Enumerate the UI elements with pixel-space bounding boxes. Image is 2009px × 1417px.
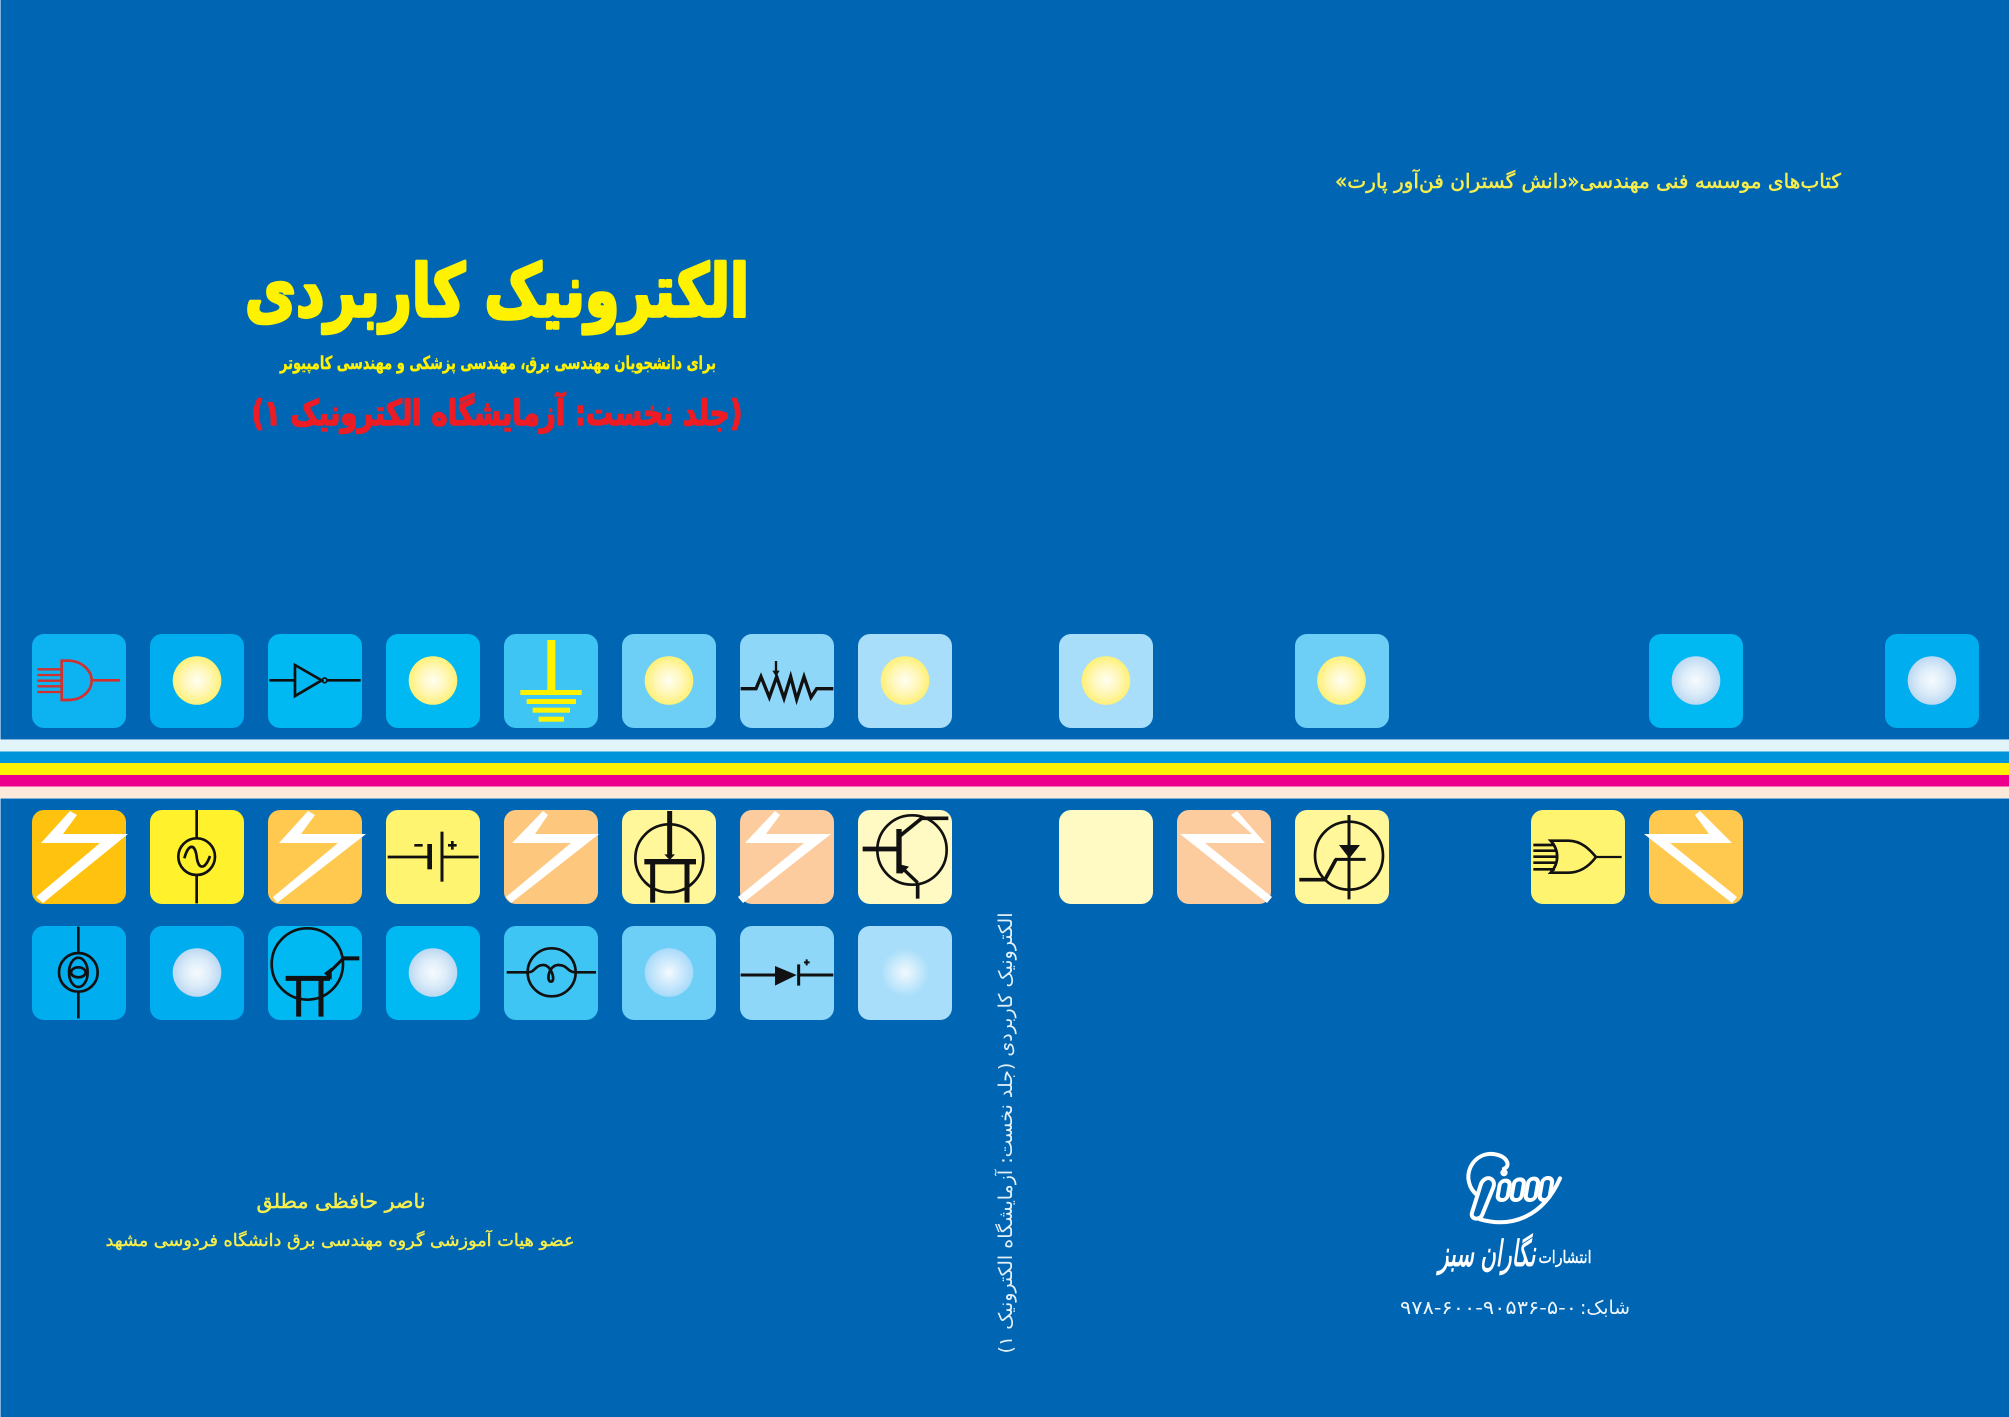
ISBN: ۹۷۸-۶۰۰-۹۰۵۳۶-۵-۰ xyxy=(1400,1297,1577,1319)
tile: blank cream xyxy=(1059,810,1153,904)
author affiliation: عضو هیات آموزشی گروه مهندسی برق دانشگاه فردوسی مشهد xyxy=(106,1229,574,1251)
tile: FET in circle xyxy=(268,926,362,1020)
tile: fading disc xyxy=(858,926,952,1020)
tile: ground symbol xyxy=(504,634,598,728)
tile: lightning 4 xyxy=(738,810,834,904)
tile: lamp xyxy=(504,926,598,1020)
tile: variable resistor xyxy=(740,634,834,728)
ISBN xyxy=(1400,1297,1630,1319)
tile: pale disc 1 xyxy=(1649,634,1743,728)
tile: sun 4 xyxy=(858,634,952,728)
tile: current source xyxy=(32,926,126,1020)
ISBN: شابک: xyxy=(1580,1297,1630,1319)
subtitle: برای دانشجویان مهندسی برق، مهندسی پزشکی و مهندسی کامپیوتر xyxy=(279,353,716,374)
tile: sun 6 xyxy=(1295,634,1389,728)
tile: diode xyxy=(740,926,834,1020)
tile: pale disc 3 xyxy=(150,926,244,1020)
tile: JFET xyxy=(622,810,716,904)
tile: thyristor xyxy=(1295,810,1389,904)
tile: AND gate xyxy=(32,634,126,728)
tile: battery xyxy=(386,810,480,904)
author name: ناصر حافظی مطلق xyxy=(256,1189,426,1213)
publisher name: انتشارات xyxy=(1538,1248,1592,1268)
publisher name: نگاران سبز xyxy=(1436,1233,1536,1275)
tile: NOT gate xyxy=(268,634,362,728)
tile: pale disc 5 xyxy=(622,926,716,1020)
publisher series line: کتاب‌های موسسه فنی مهندسی«دانش گستران فن‌آور پارت» xyxy=(1335,168,1841,194)
spine text: الکترونیک کاربردی (جلد نخست: آزمایشگاه الکترونیک ۱) xyxy=(993,912,1017,1354)
volume title: (جلد نخست: آزمایشگاه الکترونیک ۱) xyxy=(252,391,742,434)
tile: pale disc 4 xyxy=(386,926,480,1020)
tile: lightning 6 xyxy=(1644,810,1743,904)
tile: sun 2 xyxy=(386,634,480,728)
colour stripes xyxy=(0,739,2009,799)
tile: AC source xyxy=(150,810,244,904)
tile: sun 3 xyxy=(622,634,716,728)
title: الکترونیک کاربردی xyxy=(245,249,749,334)
tile: BJT transistor xyxy=(858,810,952,904)
tile: lightning 5 xyxy=(1177,810,1272,904)
tile: OR gate xyxy=(1531,810,1625,904)
tile: lightning 2 xyxy=(268,810,366,904)
tile: lightning 3 xyxy=(504,810,599,904)
tile: sun 1 xyxy=(150,634,244,728)
tile: pale disc 2 xyxy=(1885,634,1979,728)
publisher logo xyxy=(1468,1154,1560,1222)
tile: sun 5 xyxy=(1059,634,1153,728)
tile: lightning 1 xyxy=(32,810,128,904)
